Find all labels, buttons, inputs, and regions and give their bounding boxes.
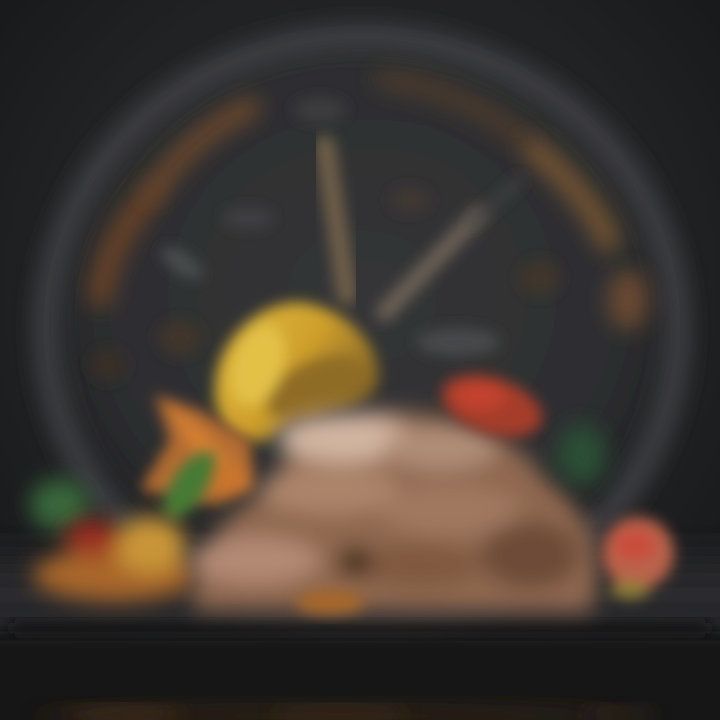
- clock marks: [90, 98, 560, 381]
- right tomato: [602, 517, 674, 599]
- right green leaf: [558, 425, 606, 485]
- clock face: [57, 40, 667, 610]
- clock rim: [46, 36, 678, 624]
- left green leaf: [30, 479, 90, 531]
- clock: [46, 36, 678, 624]
- plate edge: [10, 622, 710, 634]
- plate rim: [0, 560, 720, 630]
- plate: [0, 560, 720, 720]
- table reflection: [30, 706, 630, 720]
- table glow: warm reflections at the bottom: [65, 708, 660, 720]
- plate shadow: [0, 636, 720, 720]
- clock numerals: amber spot right: [608, 270, 648, 330]
- lemon: [215, 303, 379, 441]
- clock numerals: amber accent upper left: [155, 108, 250, 190]
- clock hand: vertical: [325, 145, 347, 295]
- orange garnish: [140, 395, 255, 505]
- clock numerals: amber ring, top right: [385, 80, 525, 140]
- carrot pieces under chicken: [296, 590, 364, 614]
- green leaf: [163, 452, 215, 520]
- chicken main: [190, 410, 598, 612]
- clock numerals: amber ring, right: [535, 150, 608, 240]
- tomato top right: [434, 363, 550, 449]
- clock hand: thin extension: [470, 180, 520, 225]
- food: [30, 303, 674, 614]
- clock numerals: amber ring, left: [100, 195, 150, 295]
- clock hand: diagonal: [385, 215, 478, 312]
- left vegetables: [33, 517, 197, 601]
